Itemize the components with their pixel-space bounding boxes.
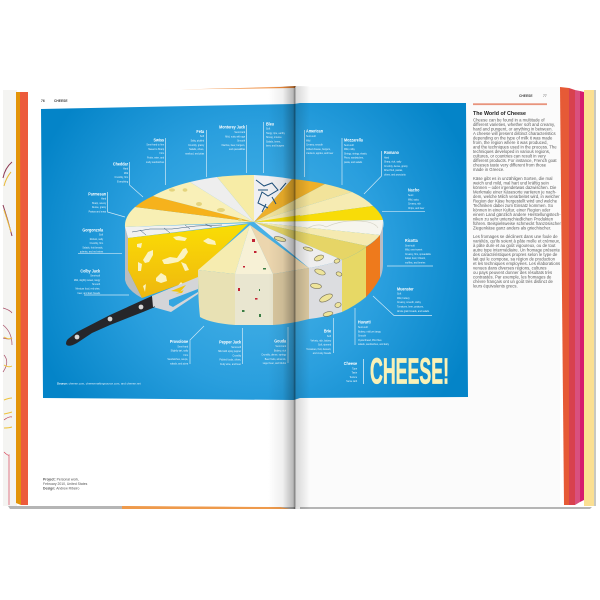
thin colour rays near centre xyxy=(254,215,300,222)
label: Romano: Crumbly, dense, grainy xyxy=(384,164,408,168)
sidebar German text: Merkmale einer Käsesorte variieren je nach- xyxy=(473,190,557,194)
sidebar German text: Käse gibt es in unzähligen Sorten, die mal xyxy=(473,176,552,181)
running heads xyxy=(41,94,547,103)
running heads: 77 xyxy=(543,94,547,98)
label: Havarti: salads, sandwiches, and dairy xyxy=(358,342,389,346)
sidebar English text: hard and pungent, or anything in between. xyxy=(473,126,553,131)
label: Cheese legend: Type xyxy=(352,366,358,370)
label: Gouda: Buttery, rich xyxy=(274,348,287,352)
label: Pepper Jack: fruity wine, and beer xyxy=(220,362,241,366)
label: Feta: Crumbly, grainy xyxy=(188,142,205,147)
sidebar French text: venues dans diverses régions, cultures xyxy=(473,266,546,270)
sidebar English text: and the techniques used in the process. The xyxy=(473,144,557,149)
label: Pepper Jack: Mild with spicy pepper xyxy=(218,349,241,353)
sidebar English text: techniques developed in various regions, xyxy=(473,149,550,154)
sidebar French text xyxy=(473,234,561,288)
sidebar English text: made in Greece. xyxy=(473,167,504,172)
label: Mozzarella xyxy=(342,137,367,185)
label: Provolone xyxy=(167,326,204,366)
top surface slices xyxy=(125,175,383,268)
label: Pepper Jack: Pepper Jack xyxy=(219,339,242,345)
label: Nacho: Mild, spicy xyxy=(408,197,419,201)
label: Havarti: Smooth xyxy=(358,333,366,338)
label: Bleu: Salads, beers, xyxy=(266,139,281,144)
label: Swiss: Firm xyxy=(160,151,165,155)
label: Brie: Soft xyxy=(327,334,331,338)
label: Monterey Jack: and quesadillas xyxy=(229,147,246,151)
label: Muenster: Creamy, smooth, sticky xyxy=(397,300,421,304)
sidebar English text: different varieties, whether soft and creamy, xyxy=(473,122,555,127)
label: Swiss: Fruits, wine, and xyxy=(147,155,165,160)
label: Provolone: Firm xyxy=(184,353,189,357)
sidebar German text: einem Land gänzlich andere Herstellungstech- xyxy=(473,212,561,217)
sidebar German text: können – oder irgendetwas dazwischen. Die xyxy=(473,185,557,190)
label: Parmesan: Parmesan xyxy=(88,191,107,197)
label: Cheddar: Crumbly, firm xyxy=(115,175,129,179)
label: Romano: Sharp, rich, salty xyxy=(384,159,402,164)
sidebar German text xyxy=(473,176,561,230)
label: Monterey Jack: Mild, nutty with age xyxy=(225,134,246,138)
label: Ricotta xyxy=(387,238,433,266)
sidebar French text: autre type intermédiaire. Un fromage présente xyxy=(473,248,561,252)
label: Cheddar: Cheddar xyxy=(113,161,128,167)
label: Colby Jack: Mexican food, red wine, xyxy=(76,286,100,291)
label: Pepper Jack: Semi-soft xyxy=(231,344,241,349)
page stack top and bottom xyxy=(8,86,592,509)
label: Monterey Jack: Smooth xyxy=(237,138,246,143)
label: Monterey Jack: Semi-hard xyxy=(234,130,246,134)
label: Gorgonzola: Robust, salty xyxy=(90,237,104,241)
label: Bleu: Soft xyxy=(266,126,270,131)
label: Gouda xyxy=(261,327,288,365)
white slice rind lines xyxy=(306,221,378,229)
label: Parmesan xyxy=(88,191,125,217)
right page edge strips xyxy=(560,87,596,506)
sidebar German text: dem, welche Milch verarbeitet wird, in welcher xyxy=(473,194,560,199)
label: Bleu: beer, and burgers xyxy=(266,143,285,148)
label: Brie: and crusty breads xyxy=(313,351,332,355)
label: Havarti: Havarti xyxy=(358,319,371,325)
label: American: Grilled cheese, burgers, xyxy=(306,147,331,151)
label: Cheese legend: Texture xyxy=(350,375,358,379)
label: Ricotta: Ricotta xyxy=(405,238,418,243)
blue infographic panel xyxy=(41,103,468,400)
label: Cheddar: Hard xyxy=(123,166,129,171)
sidebar English text: A cheese will present distinct characteristics xyxy=(473,131,556,136)
sidebar English text: cultures, or countries can result in very xyxy=(473,153,547,158)
label: Mozzarella: Mozzarella xyxy=(344,137,364,143)
sidebar German text: können in einer Kultur, einer Region oder xyxy=(473,208,551,212)
label: Nacho: Chips, and beer xyxy=(408,206,424,210)
label: Cheese legend: Serve with xyxy=(346,379,358,383)
label: Ricotta: Italian food, Chianti, xyxy=(405,256,426,260)
project credits: Project: Personal work, xyxy=(43,478,79,482)
label: Romano: olives, and prosciutto xyxy=(384,172,406,177)
running heads: 76 xyxy=(41,99,45,103)
label: Havarti: Buttery, mild yet tangy xyxy=(358,329,381,333)
label: Bleu: Strong, intense xyxy=(266,135,282,139)
label: Pepper Jack: Crumbly xyxy=(233,353,242,358)
source note: Source: cheese.com, cheesemakingsource.com, and cheese.net xyxy=(57,382,141,386)
label: Brie: Velvety, rich, buttery xyxy=(310,338,332,342)
label: Cheese legend: Taste xyxy=(352,370,358,375)
label: American: Creamy, smooth xyxy=(306,142,323,147)
label: Colby Jack: Smooth xyxy=(92,282,101,286)
label: Colby Jack: beer, and dark breads xyxy=(78,290,101,295)
label: Provolone: Provolone xyxy=(170,339,189,344)
label: Provolone: Slightly tart, salty xyxy=(171,348,189,353)
side faces of wheel xyxy=(309,260,342,319)
sidebar German text: weich und mild, mal hart und kräftig sein xyxy=(473,180,549,186)
label: Romano: Hard xyxy=(384,155,389,159)
label: Pepper Jack xyxy=(218,328,242,366)
label: Swiss xyxy=(146,137,166,185)
label: Muenster: Soft xyxy=(397,291,401,296)
knife xyxy=(66,277,198,346)
project credits: February 2010, United States xyxy=(43,482,88,486)
gorgonzola side and top xyxy=(125,227,142,298)
cheese wheel xyxy=(125,175,383,325)
label: Muenster xyxy=(373,286,432,316)
label: Gorgonzola: Gorgonzola xyxy=(82,227,104,233)
label: Mozzarella: Pizza, sandwiches, xyxy=(344,155,364,160)
label: Parmesan: Sharp, savory xyxy=(92,200,107,205)
label: Mozzarella: Mild, milky xyxy=(344,147,355,151)
label: Gorgonzola: Crumbly, firm xyxy=(90,241,104,245)
label: American: crackers, apples, and beer xyxy=(306,151,333,155)
label: Havarti xyxy=(355,308,389,346)
label: Gouda: Crumbly, dense, springy xyxy=(261,352,287,357)
label: Ricotta: muffins, and berries xyxy=(405,260,426,265)
label: Swiss: Swiss xyxy=(154,137,165,143)
label: Muenster: Muenster xyxy=(397,286,414,292)
label: Gouda: Gouda xyxy=(274,338,287,344)
spine shadow xyxy=(268,86,310,509)
label: Parmesan: Pastas and meat xyxy=(89,209,106,214)
sidebar German text: Ziegenkäse ganz anders als griechischer. xyxy=(473,226,551,230)
label: Muenster: whole grain breads, and salads xyxy=(397,308,430,313)
label: American xyxy=(304,128,333,177)
label: Provolone: Sandwiches, soups, xyxy=(167,357,188,361)
label: Feta: Salty, pickled xyxy=(191,138,205,143)
label: Parmesan: Dense, grainy xyxy=(92,205,107,209)
sidebar French text: chèvre français ont un goût très distinct de xyxy=(473,279,553,284)
handle xyxy=(66,296,155,346)
label: Colby Jack xyxy=(74,268,129,295)
label: Brie: Brie xyxy=(324,328,332,334)
label: American: Semi-soft xyxy=(306,134,316,138)
sidebar French text: à pâte dure et au goût vigoureux, ou de tout xyxy=(473,243,556,248)
label: Parmesan: Hard xyxy=(101,196,107,201)
label: Muenster: Mild, buttery xyxy=(397,296,410,300)
blue veins xyxy=(256,180,286,212)
label: Mozzarella: Semi-soft xyxy=(344,142,354,147)
book cover edge with decorative arcs xyxy=(3,90,17,506)
label: Pepper Jack: Pickled foods, olives, xyxy=(219,357,241,362)
label: Muenster: Tomatoes, beer, potatoes, xyxy=(397,304,424,309)
sidebar German text: Techniken dabei zum Einsatz kommen. So xyxy=(473,203,554,208)
label: Bleu: Tangy, ripe, earthy xyxy=(266,130,285,135)
label: Romano: Dried fruit, pastas, xyxy=(384,168,403,172)
sidebar French text: lait qui le compose, sa région de production xyxy=(473,256,556,262)
label: Monterey Jack: Monterey Jack xyxy=(219,124,246,130)
label: Gouda: Semi-hard xyxy=(275,344,287,348)
label: Gorgonzola: Salads, fruit breads, xyxy=(82,245,103,250)
label: Nacho xyxy=(382,187,425,212)
label: Colby Jack: Mild, slightly sweet, tangy xyxy=(74,278,101,282)
project credits xyxy=(43,478,88,490)
label: Cheese legend xyxy=(344,361,358,383)
sidebar English text xyxy=(473,117,557,172)
label: Cheddar xyxy=(113,161,143,197)
label: Provolone: salads, and pizza xyxy=(170,361,189,366)
label: Colby Jack: Semi-soft xyxy=(90,273,100,278)
label: Feta: Soft xyxy=(200,134,204,138)
label: Brie: Tomatoes, fruit, dessert, xyxy=(306,347,331,351)
label: Gorgonzola: Soft xyxy=(99,232,103,237)
sidebar French text: ou pays peuvent donner des résultats très xyxy=(473,270,552,275)
label: Feta: seafood, and pitas xyxy=(185,151,205,156)
label: Nacho: Semi xyxy=(408,193,414,197)
project credits: Design: Andrew Ribeiro xyxy=(43,486,79,490)
label: Feta: Salads, olives, xyxy=(189,147,204,151)
label: American: Mild xyxy=(306,138,311,142)
label: Mozzarella: pasta, and salads xyxy=(344,160,363,164)
label: Swiss: Sweet to Sharp xyxy=(148,147,165,151)
label: Mozzarella: Stringy, stringy, elastic xyxy=(344,151,367,156)
sidebar rule xyxy=(473,103,547,105)
label: Cheddar: Everything xyxy=(117,179,129,184)
sidebar English text: different products. For instance, French goat xyxy=(473,158,557,163)
label: Cheddar: Mild xyxy=(124,170,129,175)
sidebar heading: The World of Cheese xyxy=(473,111,526,117)
text: CHEESE! xyxy=(370,350,449,392)
book pages xyxy=(28,87,560,507)
sidebar French text: et les techniques employées. Les élaborations xyxy=(473,261,560,266)
label: Gouda: Beer fruits, almonds, xyxy=(265,357,286,361)
sidebar English text: depending on the type of milk it was made xyxy=(473,135,553,140)
sidebar German text: führen. Beispielsweise schmeckt französischer xyxy=(473,221,561,226)
label: Feta xyxy=(185,129,206,177)
sidebar English text: from, the region where it was produced, xyxy=(473,140,548,145)
label: Brie xyxy=(306,318,334,355)
label: Bleu xyxy=(264,121,285,173)
label: Swiss: melty sandwiches xyxy=(146,159,165,164)
label: Bleu: Bleu xyxy=(266,121,275,127)
label: Cheese legend: Cheese xyxy=(344,361,358,366)
blade over yellow xyxy=(152,277,198,307)
sidebar German text: niken zu sehr unterschiedlichen Produkten xyxy=(473,216,554,222)
ellipses in side and top xyxy=(274,236,343,317)
front wedge: provolone, pepper jack, gouda xyxy=(198,225,309,325)
label: Ricotta: Semi-soft xyxy=(405,243,415,247)
label: Brie: Soft, ripened xyxy=(318,342,332,347)
swiss holes xyxy=(169,188,175,192)
label: Nacho: Creamy, rich xyxy=(408,201,421,206)
sidebar German text: Region der Käse hergestellt wird und welche xyxy=(473,198,558,204)
label: Feta: Feta xyxy=(196,129,205,134)
label: Romano xyxy=(364,150,408,194)
sidebar English text: Cheese can be found in a multitude of xyxy=(473,117,545,122)
sidebar French text: leurs équivalents grecs. xyxy=(473,284,518,288)
label: Nacho: Nacho xyxy=(408,187,420,193)
pepper flecks xyxy=(238,239,266,317)
running heads: CHEESE xyxy=(54,99,68,103)
label: Monterey Jack xyxy=(219,124,246,173)
label: Havarti: Semi-soft xyxy=(358,325,368,329)
label: Monterey Jack: Nachos, beer, burgers, xyxy=(222,143,245,147)
sidebar English text: cheeses taste very different from those xyxy=(473,162,547,167)
sidebar French text: variétés, qu'ils soient à pâte molle et crémeux, xyxy=(473,238,560,244)
sidebar French text: contrastés. Par exemple, les fromages de xyxy=(473,274,552,280)
label: Romano: Romano xyxy=(384,150,399,155)
label: Gouda: Lager beer, and Merlot xyxy=(263,361,286,365)
label: Gorgonzola xyxy=(78,227,122,254)
label: Havarti: Oysterbread, Pilot fries xyxy=(358,338,382,342)
label: Swiss: Semi-hard to firm xyxy=(146,142,165,147)
label: American: American xyxy=(306,128,323,134)
label: Ricotta: Creamy, firm, spreadable xyxy=(405,252,431,256)
left page edge strips xyxy=(16,92,28,505)
label: Colby Jack: Colby Jack xyxy=(80,268,101,274)
label: Gorgonzola: polenta, and red wines xyxy=(80,249,104,254)
sidebar French text: des caractéristiques propres selon le type de xyxy=(473,252,558,257)
yellow wedge xyxy=(128,224,248,298)
sidebar French text: Les fromages se déclinent dans une foule de xyxy=(473,234,558,239)
divider before title xyxy=(362,359,364,384)
label: Provolone: Semi-hard xyxy=(177,344,189,348)
label: Ricotta: Mild, semi-sweet xyxy=(405,247,422,252)
running heads: CHEESE xyxy=(519,94,533,98)
blade xyxy=(152,277,198,312)
